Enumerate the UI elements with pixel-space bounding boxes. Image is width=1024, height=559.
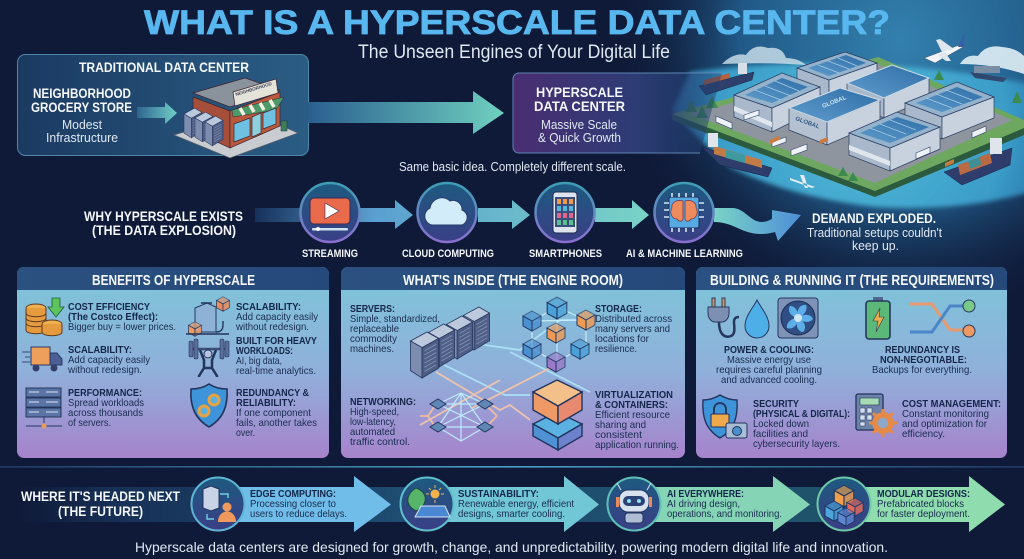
building: back [797,52,877,98]
label: cloud computing: CLOUD COMPUTING [402,248,494,260]
text: sustainability: designs, smarter cooling. [458,508,565,520]
text: scalability right: SCALABILITY: [236,301,301,313]
text: redundancy and reliability: over. [236,427,255,439]
text: edge computing: Processing closer to [250,498,336,510]
text: servers: Simple, standardized, [350,313,440,325]
text: neighborhood grocery store: Infrastructure [46,130,118,145]
heading: traditional: TRADITIONAL DATA CENTER [79,60,249,75]
arrow: curved to demand [714,208,801,241]
text: performance: of servers. [68,417,111,429]
text: redundancy and reliability: If one component [236,407,311,419]
text: security: (PHYSICAL & DIGITAL): [753,408,850,420]
heading: why hyperscale exists: (THE DATA EXPLOSION) [92,222,236,238]
building: centre: GLOBAL [794,116,820,131]
text: edge computing [250,488,347,520]
label: smartphones: SMARTPHONES [529,248,602,260]
text: demand exploded: Traditional setups couldn't [807,226,942,240]
text: scalability right: Add capacity easily [236,311,319,323]
text: cost management: efficiency. [902,428,945,440]
text: cost efficiency: Bigger buy = lower prices. [68,321,176,333]
text: redundancy non-negotiable: REDUNDANCY IS [885,344,960,356]
text: demand exploded: DEMAND EXPLODED. [812,210,936,226]
caption: same basic idea: Same basic idea. Completely different scale. [399,160,626,174]
text: performance: Spread workloads [68,397,144,409]
arrow: traditional to hyperscale [308,91,504,134]
text: edge computing: EDGE COMPUTING: [250,488,336,500]
panel: building and running it [696,267,1007,458]
text: cost management [902,398,1001,440]
text: modular designs: Prefabricated blocks [877,498,964,510]
text: hyperscale: HYPERSCALE [536,84,623,100]
icon: grocery store with servers: NEIGHBORHOOD [235,81,273,97]
heading: benefits: BENEFITS OF HYPERSCALE [92,272,255,289]
text: performance: PERFORMANCE: [68,387,142,399]
icon: server stack [26,388,62,428]
text: power and cooling [716,344,822,386]
text: power and cooling: requires careful planning [716,364,822,376]
text: servers: replaceable [350,323,399,335]
icon: sustainability [400,478,454,530]
panel: benefits of hyperscale [17,267,329,458]
trees [685,70,1022,181]
trucks [716,110,986,159]
arrow: sustainability [400,476,599,532]
text: servers: commodity [350,333,398,345]
text: AI everywhere: AI driving design, [667,498,740,510]
icon: AI chip brain [654,183,714,242]
icon: cloud [418,183,476,242]
ship: bottom left [702,133,772,177]
building: centre: GLOBAL [822,95,848,110]
icon: edge computing [192,478,244,530]
text: cost management: COST MANAGEMENT: [902,398,1001,410]
text: storage: many servers and [595,323,670,335]
text: AI everywhere: AI EVERYWHERE: [667,488,744,500]
text: virtualization [595,389,679,451]
text: sustainability: Renewable energy, efficient [458,498,574,510]
text: hyperscale: DATA CENTER [534,98,625,114]
ship: bottom right [944,138,1012,185]
island base [672,58,1024,197]
icon: battery [866,297,890,339]
building: right [905,82,994,139]
icon: fan [778,298,818,338]
heading: what's inside: WHAT'S INSIDE (THE ENGINE ROOM) [403,272,623,289]
text: cost management: and optimization for [902,418,987,430]
icon: water drop [745,300,769,338]
text: virtualization: sharing and [595,419,646,431]
text: hyperscale: & Quick Growth [538,130,621,145]
text: built for heavy workloads [236,335,317,377]
heading: why hyperscale exists [84,208,243,238]
text: servers: machines. [350,343,394,355]
icon: coins [26,298,64,336]
text: edge computing: users to reduce delays. [250,508,347,520]
plane: large [924,35,965,63]
text: redundancy non-negotiable: NON-NEGOTIABLE: [880,354,967,366]
text: power and cooling: and advanced cooling. [721,374,817,386]
label: AI and machine learning: AI & MACHINE LEARNING [626,248,743,260]
text: modular designs [877,488,970,520]
heading: where it's headed next: WHERE IT'S HEADED NEXT [21,488,180,504]
icon: power plug [708,298,739,337]
text: hyperscale: Massive Scale [541,117,617,132]
text: networking [350,396,416,448]
text: scalability left [67,344,151,376]
icon: redundant paths [910,300,975,337]
text: scalability right [235,301,319,333]
text: networking: traffic control. [350,436,410,448]
text: security: cybersecurity layers. [753,438,840,450]
text: redundancy and reliability: REDUNDANCY & [236,387,309,399]
icon: server racks [411,307,490,378]
text: cost efficiency: COST EFFICIENCY [68,301,150,313]
footer statement: Hyperscale data centers are designed for growth, change, and unpredictability, powering modern digital life and innovation. [135,539,888,555]
text: storage: STORAGE: [595,303,642,315]
text: virtualization: consistent [595,429,642,441]
icon: truck [22,347,62,372]
text: hyperscale [534,84,625,145]
icon: weightlifter [189,339,229,377]
building: left [734,73,820,132]
text: built for heavy workloads: AI, big data, [236,355,282,367]
clouds [722,47,806,65]
icon: smartphone [536,183,594,242]
ship: top left [699,63,754,95]
text: sustainability [458,488,574,520]
icon: streaming [300,183,360,242]
text: scalability left: Add capacity easily [68,354,151,366]
text: AI everywhere: operations, and monitoring. [667,508,782,520]
arrow: AI everywhere [608,476,810,532]
text: virtualization: & CONTAINERS: [595,399,668,411]
text: cost management: Constant monitoring [902,408,989,420]
arrow: small [137,102,177,124]
text: demand exploded [807,210,942,253]
icon: robot [608,478,660,530]
text: scalability right: without redesign. [235,321,309,333]
text: power and cooling: Massive energy use [727,354,811,366]
text: networking: High-speed, [350,406,399,418]
subtitle: The Unseen Engines of Your Digital Life [358,42,670,63]
text: neighborhood grocery store [31,86,132,145]
panel: traditional data center [18,54,308,158]
text: cost efficiency: (The Costco Effect): [68,311,158,323]
text: networking: automated [350,426,395,438]
plane: small [790,175,815,188]
arrow chain: data drivers [255,200,649,229]
text: performance [68,387,144,429]
heading: where it's headed next [21,488,180,519]
text: built for heavy workloads: WORKLOADS: [236,345,293,357]
heading: why hyperscale exists: WHY HYPERSCALE EXISTS [84,208,243,224]
icon: modular blocks [818,478,870,530]
text: redundancy non-negotiable [872,344,972,376]
text: redundancy and reliability [236,387,317,439]
ocean [672,63,1024,208]
arrow: edge computing [192,476,391,532]
ship: top right [970,66,1007,82]
text: scalability left: without redesign. [67,364,142,376]
text: scalability left: SCALABILITY: [68,344,132,356]
text: security: facilities and [753,428,808,440]
icon: shield gears [191,384,227,427]
text: redundancy non-negotiable: Backups for everything. [872,364,972,376]
text: redundancy and reliability: RELIABILITY: [236,397,296,409]
text: modular designs: MODULAR DESIGNS: [877,488,970,500]
text: AI everywhere [667,488,782,520]
text: redundancy and reliability: fails, another takes [236,417,317,429]
text: neighborhood grocery store: Modest [62,117,102,132]
text: built for heavy workloads: real-time analytics. [236,365,316,377]
icon: grocery store with servers [174,78,298,158]
band: future timeline [20,487,970,522]
text: networking: low-latency, [350,416,396,428]
arrow: modular designs [818,476,1005,532]
text: virtualization: VIRTUALIZATION [595,389,673,401]
text: neighborhood grocery store: NEIGHBORHOOD [33,86,131,101]
icon: container cubes [533,380,582,450]
text: neighborhood grocery store: GROCERY STORE [31,100,132,115]
text: sustainability: SUSTAINABILITY: [458,488,539,500]
icon: security shield and camera [703,395,747,438]
panel: hyperscale data center [513,73,722,153]
building: back right [847,65,929,118]
text: security [753,398,850,450]
icon: scaling blocks [186,297,230,336]
icon: storage cubes [523,297,595,372]
text: storage: Distributed across [595,313,672,325]
text: storage [595,303,672,355]
text: storage: resilience. [595,343,637,355]
building: centre [789,88,880,145]
text: servers [350,303,440,355]
text: networking: NETWORKING: [350,396,416,408]
text: virtualization: Efficient resource [595,409,670,421]
heading: where it's headed next: (THE FUTURE) [58,503,143,519]
text: demand exploded: keep up. [852,239,899,253]
building: front [849,112,940,171]
text: security: SECURITY [753,398,799,410]
icon: network nodes [430,399,493,432]
text: servers: SERVERS: [350,303,395,315]
text: power and cooling: POWER & COOLING: [724,344,814,356]
title: WHAT IS A HYPERSCALE DATA CENTER? [144,4,890,42]
text: virtualization: application running. [595,439,679,451]
diagram: network connections [420,307,590,441]
label: streaming: STREAMING [302,248,358,260]
text: built for heavy workloads: BUILT FOR HEAVY [236,335,317,347]
text: performance: across thousands [68,407,143,419]
text: security: Locked down [753,418,809,430]
text: cost efficiency [68,301,176,333]
illustration: hyperscale campus island [672,35,1024,208]
text: modular designs: for faster deployment. [877,508,970,520]
panel: what's inside [341,267,685,458]
icon: calculator and gear [856,394,897,437]
text: storage: locations for [595,333,649,345]
